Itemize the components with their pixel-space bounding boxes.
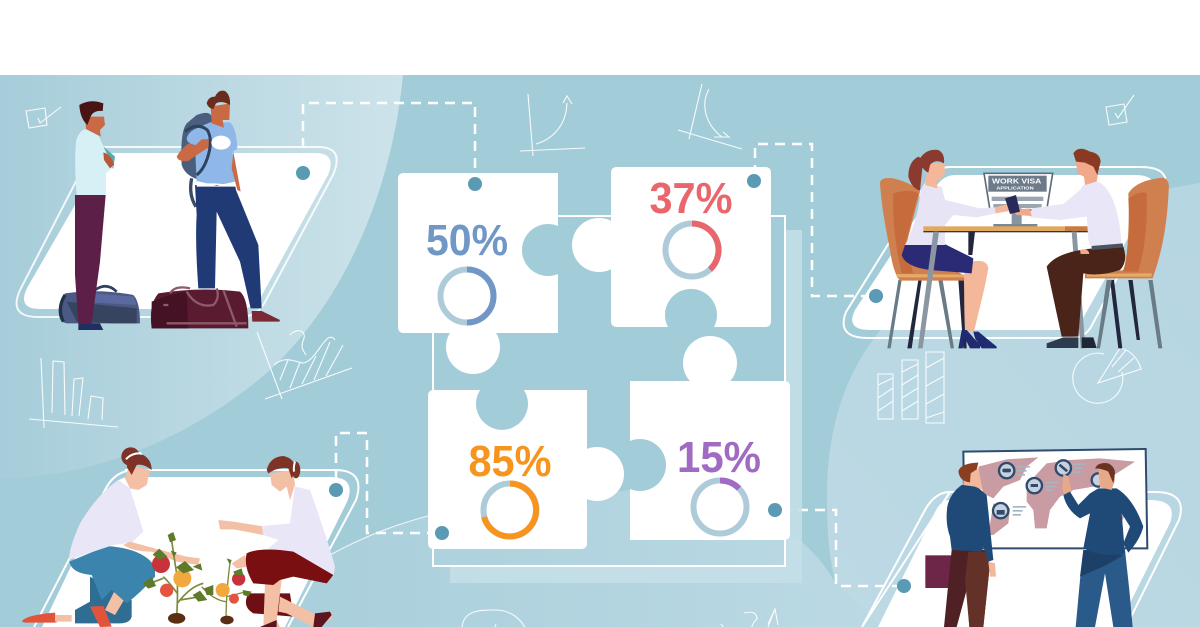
puzzle piece: 37% [572,167,771,327]
puzzle piece: 50%: 50% [426,216,508,265]
right chair [1085,178,1169,348]
briefcase [925,555,965,588]
panel: bottom-left card [34,470,358,627]
monitor with application form: APPLICATION [996,186,1034,191]
left chair [880,178,967,348]
dashed connectors [303,103,897,586]
panel: top-left card [17,147,337,317]
illustration: two women tending plants [22,447,335,627]
plant left [143,532,207,624]
table [918,226,1088,348]
puzzle piece: 15% [630,336,790,540]
passport [1005,195,1020,214]
man interviewer [1012,149,1125,348]
man with backpack [177,91,280,322]
blue duffel bag [59,286,140,323]
puzzle frame [433,216,785,566]
puzzle piece: 50% [398,173,558,374]
panel: bottom-right card [862,492,1181,627]
maroon duffel bag [151,287,248,328]
connector dots [296,166,911,593]
monitor with application form: WORK VISA [992,176,1042,185]
left woman [22,447,200,627]
illustration: two travellers with luggage [59,91,280,330]
world map board [963,449,1147,548]
puzzle piece: 85%: 85% [468,437,552,486]
woman applicant [902,150,1015,348]
panel: top-right card [844,167,1166,338]
standing man [75,101,115,330]
puzzle piece: 15%: 15% [677,433,761,482]
puzzle piece: 85% [428,390,624,549]
light square behind frame [450,230,802,583]
puzzle piece: 37%: 37% [650,174,732,223]
right woman [218,456,335,627]
monitor with application form [984,173,1053,227]
illustration: two businessmen at world map [925,449,1147,627]
illustration: work visa interview [880,149,1169,348]
plant right [202,558,252,624]
right businessman [1062,463,1143,627]
left businessman [944,463,996,627]
